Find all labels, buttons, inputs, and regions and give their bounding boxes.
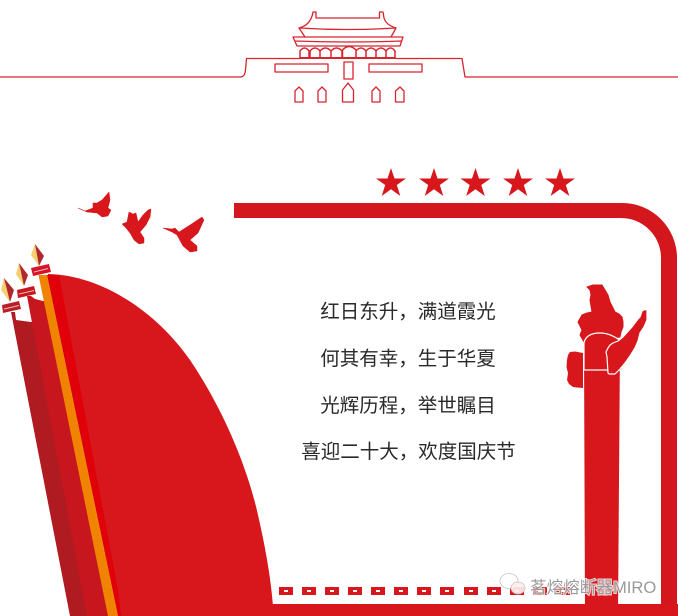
deep red band: [47, 275, 121, 616]
beast: [578, 285, 623, 342]
watermark text: 茗熔熔断器MIRO: [530, 578, 656, 597]
wechat icon: [500, 574, 525, 594]
gate tower arches: [300, 46, 395, 58]
spear head 1: [1, 278, 10, 302]
orange band: [38, 275, 118, 616]
crossbar 1: [2, 301, 21, 313]
spear head 3: [31, 244, 39, 266]
watermark: [500, 574, 656, 597]
horizon line: [0, 58, 678, 77]
spears: [1, 244, 51, 313]
dark band: [11, 312, 95, 616]
poem text: 喜迎二十大，欢度国庆节: [301, 441, 516, 463]
poem text: 何其有幸，生于华夏: [320, 348, 496, 370]
poem text: [301, 301, 516, 463]
poem text: 光辉历程，举世瞩目: [320, 395, 496, 417]
crossbar 2: [17, 286, 36, 298]
bottom bar: [270, 604, 678, 616]
spear head 2: [16, 263, 24, 286]
column cap: [584, 333, 622, 370]
left cloud: [566, 352, 583, 388]
wing cloud: [606, 310, 647, 374]
row of small squares: [279, 587, 570, 595]
column: [584, 343, 620, 616]
medium band: [27, 296, 116, 616]
doves: [78, 192, 204, 252]
five stars: [376, 168, 575, 196]
crossbar 3: [31, 264, 51, 276]
Tiananmen line-art header: [0, 12, 678, 102]
red frame: [234, 203, 677, 616]
left banner: [11, 274, 273, 616]
poem text: 红日东升，满道霞光: [320, 301, 496, 323]
wall plaques and central door: [275, 62, 422, 79]
huabiao column head with beast and clouds: [566, 285, 647, 388]
gate tower roof: [293, 12, 403, 46]
dome: [48, 274, 273, 616]
lower gateway arches: [295, 83, 404, 102]
